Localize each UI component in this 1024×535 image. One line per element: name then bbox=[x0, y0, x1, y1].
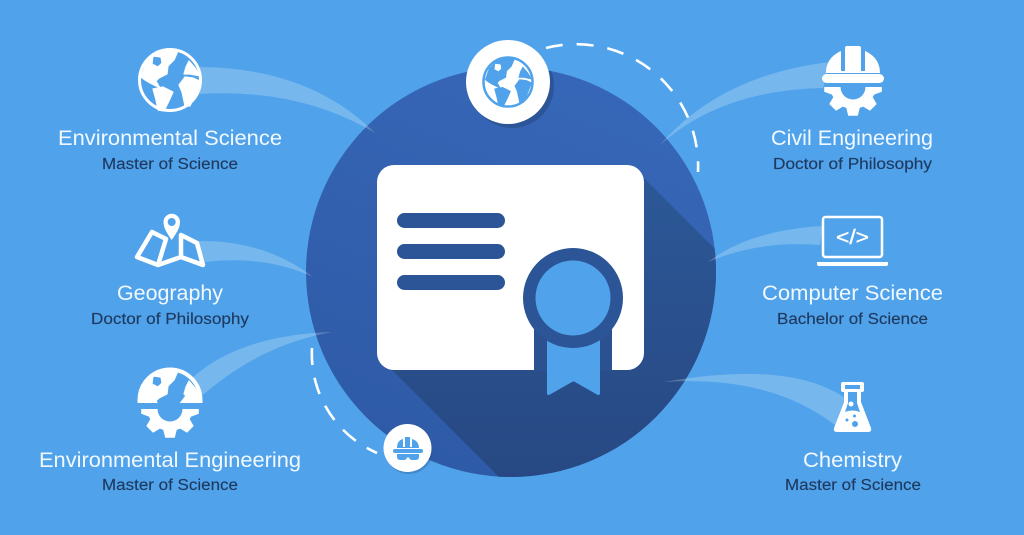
panel: Civil Engineering bbox=[659, 46, 933, 173]
connector bbox=[659, 62, 830, 146]
icon: laptop bbox=[817, 217, 888, 266]
panel: Geography bbox=[91, 214, 313, 328]
degree: Master of Science bbox=[102, 156, 238, 173]
puck: globe bbox=[466, 40, 554, 128]
degree: Bachelor of Science bbox=[777, 311, 928, 328]
connector bbox=[192, 332, 332, 395]
heading: Computer Science bbox=[762, 282, 943, 305]
infographic bbox=[40, 40, 942, 490]
certificate bbox=[377, 165, 644, 395]
heading: Civil Engineering bbox=[771, 127, 933, 150]
connector bbox=[198, 241, 313, 277]
icon: globe bbox=[140, 49, 200, 111]
panel: Environmental Engineering bbox=[39, 332, 332, 494]
heading: Geography bbox=[117, 282, 224, 305]
icon: flask bbox=[834, 382, 871, 432]
dashed arc bottom left bbox=[312, 348, 377, 453]
degree: Master of Science bbox=[102, 477, 238, 494]
icon: globe and gear bbox=[139, 369, 201, 438]
degree: Doctor of Philosophy bbox=[91, 311, 249, 328]
degree: Master of Science bbox=[785, 477, 921, 494]
connector bbox=[664, 374, 845, 425]
heading: Environmental Science bbox=[58, 127, 282, 150]
medal ribbon bbox=[523, 248, 623, 395]
text lines bbox=[397, 213, 505, 290]
panel: Chemistry bbox=[664, 374, 921, 494]
puck: helmet bbox=[384, 424, 433, 474]
panel: Computer Science bbox=[708, 217, 943, 328]
icon: map with pin bbox=[137, 214, 203, 265]
certificate card bbox=[377, 165, 644, 370]
icon: laptop: </> bbox=[836, 227, 869, 249]
degree: Doctor of Philosophy bbox=[773, 156, 932, 173]
connector bbox=[200, 67, 375, 133]
icon: helmet and gear bbox=[822, 46, 884, 116]
connector bbox=[708, 226, 823, 262]
central circle bbox=[306, 70, 716, 477]
heading: Environmental Engineering bbox=[39, 449, 301, 472]
panel: Environmental Science bbox=[58, 49, 375, 173]
dashed arc top right bbox=[546, 44, 698, 172]
heading: Chemistry bbox=[803, 449, 903, 472]
